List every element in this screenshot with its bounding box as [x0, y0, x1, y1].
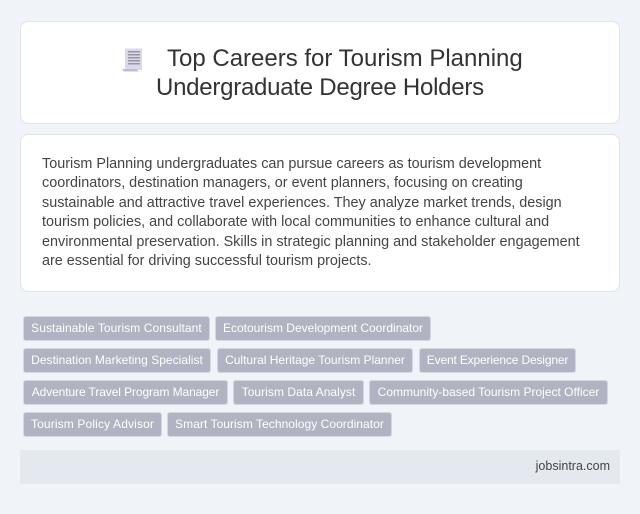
tag: Destination Marketing Specialist — [31, 353, 203, 367]
tag: Tourism Policy Advisor — [31, 417, 154, 431]
tag — [233, 380, 364, 405]
description text: tourism policies, and collaborate with local communities to enhance cultural and — [42, 214, 549, 230]
icon: document scroll — [122, 48, 142, 72]
panel: description — [20, 134, 620, 292]
tag — [23, 380, 228, 405]
tag — [419, 348, 576, 373]
title: Undergraduate Degree Holders — [156, 74, 484, 101]
tag — [23, 412, 162, 437]
tag: Sustainable Tourism Consultant — [31, 321, 202, 335]
panel: title card — [20, 21, 620, 124]
description text: Tourism Planning undergraduates can pursue careers as tourism development — [42, 156, 541, 172]
tag: Community-based Tourism Project Officer — [378, 385, 599, 399]
tag: Cultural Heritage Tourism Planner — [225, 353, 405, 367]
tag — [217, 348, 413, 373]
footer credit: jobsintra.com — [536, 459, 610, 473]
tag — [369, 380, 608, 405]
description text: coordinators, destination managers, or event planners, focusing on creating — [42, 175, 523, 191]
title — [156, 45, 523, 101]
tag: Ecotourism Development Coordinator — [223, 321, 423, 335]
tag: Smart Tourism Technology Coordinator — [175, 417, 384, 431]
career tags — [23, 316, 608, 437]
tag: Tourism Data Analyst — [242, 385, 355, 399]
footer — [20, 450, 620, 484]
tag: Event Experience Designer — [427, 353, 568, 367]
tag — [215, 316, 431, 341]
description text: are essential for driving successful tourism projects. — [42, 253, 372, 269]
tag — [167, 412, 392, 437]
description text: environmental preservation. Skills in strategic planning and stakeholder engagement — [42, 234, 580, 250]
tag — [23, 316, 210, 341]
description text — [42, 156, 580, 269]
title: Top Careers for Tourism Planning — [167, 45, 523, 72]
tag: Adventure Travel Program Manager — [32, 385, 219, 399]
tag — [23, 348, 211, 373]
description text: sustainable and attractive travel experiences. They analyze market trends, design — [42, 195, 562, 211]
